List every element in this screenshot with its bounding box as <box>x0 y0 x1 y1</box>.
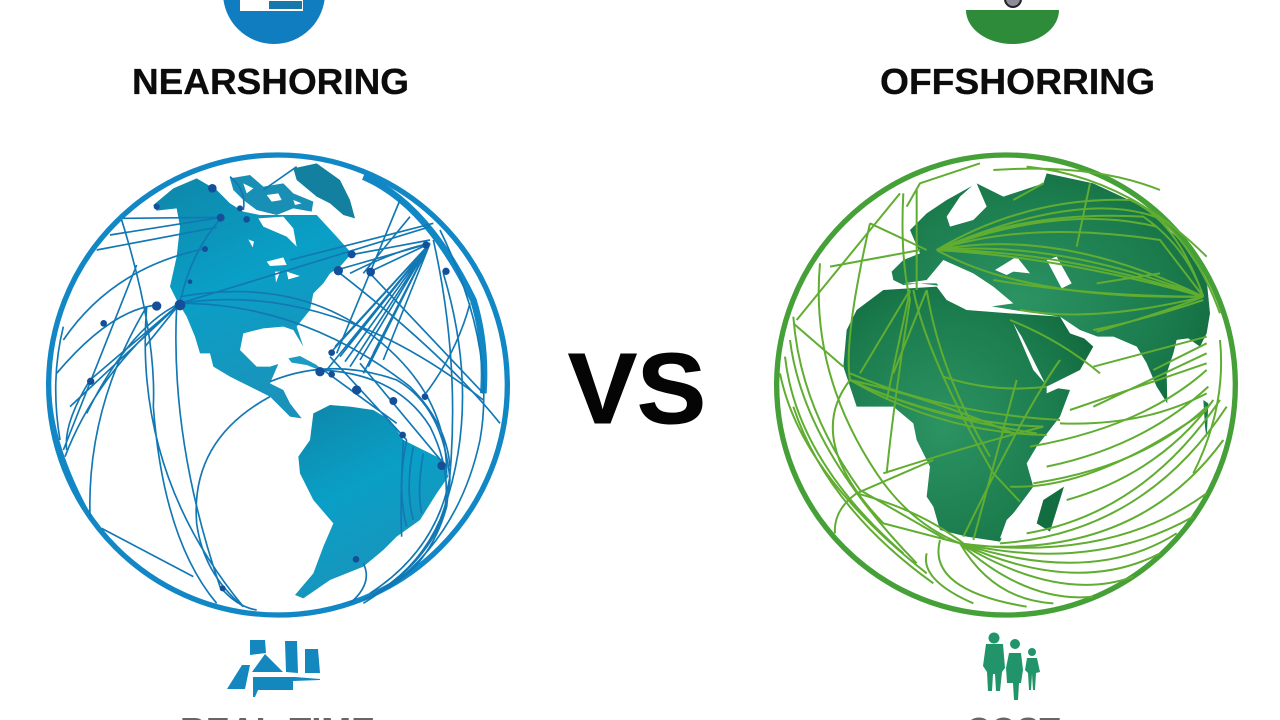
routes <box>780 163 1227 607</box>
land: Eurasia <box>892 173 1210 403</box>
heading: nearshoring: NEARSHORING <box>132 61 409 102</box>
land: Africa and Arabia <box>843 287 1093 542</box>
land: North America <box>153 178 352 418</box>
routes <box>56 167 500 610</box>
icon: offshoring people group <box>983 632 1040 700</box>
land: Cuba <box>288 356 323 372</box>
land: Greenland <box>293 163 355 218</box>
land: South America <box>295 405 448 598</box>
globe: nearshoring Americas with routes <box>49 155 507 615</box>
land: Madagascar <box>1037 487 1064 532</box>
heading: offshoring: OFFSHORRING <box>880 61 1155 102</box>
land: Arctic islands <box>230 175 313 215</box>
route hub dots <box>87 184 450 591</box>
globe rim <box>777 155 1235 615</box>
globe: offshoring Africa and Eurasia with routes <box>777 155 1235 615</box>
icon: offshoring green badge <box>966 0 1059 44</box>
icon: nearshoring blue badge <box>223 0 325 44</box>
seas: white water bodies <box>903 170 1188 393</box>
icon: nearshoring buildings <box>227 640 320 697</box>
land: Southeast Asia <box>1203 400 1208 438</box>
versus label: VS <box>568 333 706 445</box>
globe rim <box>49 155 507 615</box>
land: bays and lakes <box>243 183 375 283</box>
